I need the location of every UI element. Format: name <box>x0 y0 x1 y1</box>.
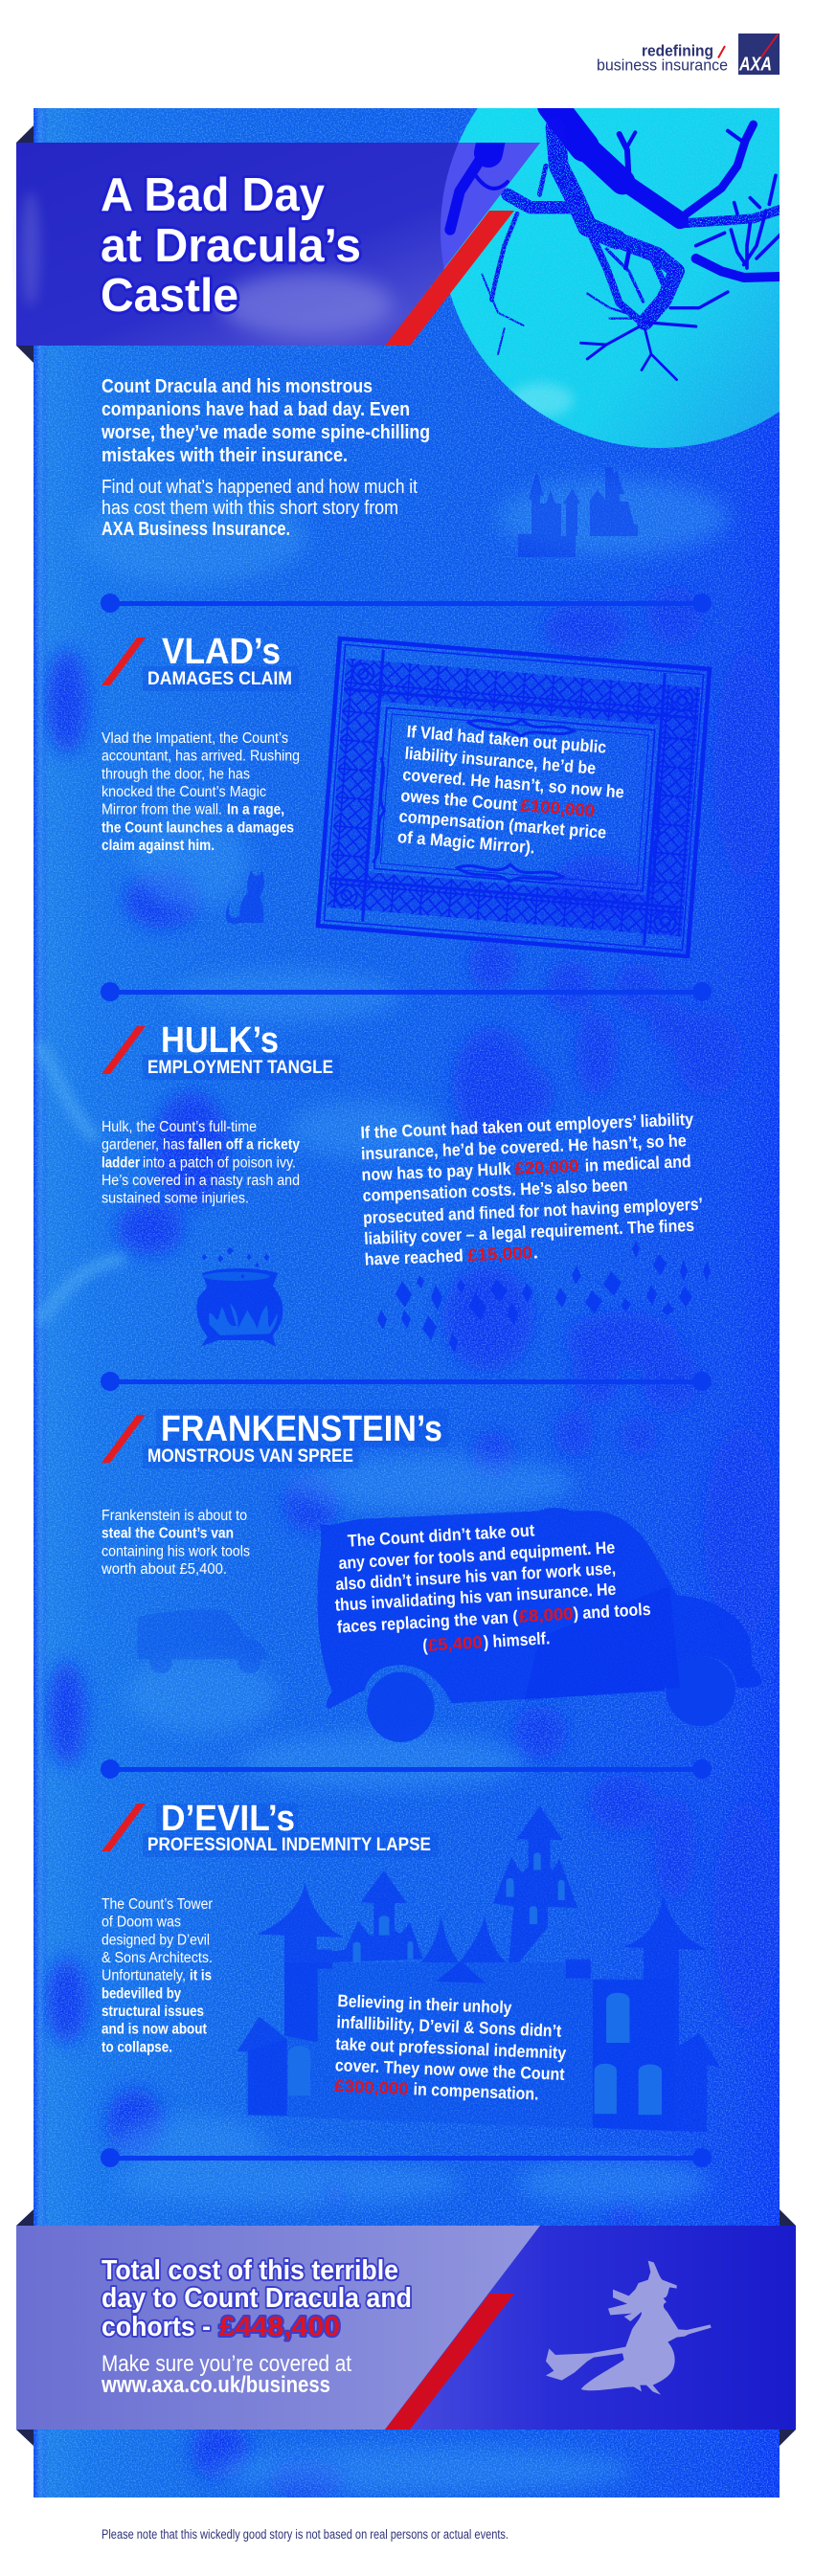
heading: MONSTROUS VAN SPREE <box>147 1446 353 1467</box>
callout text: If the Count had taken out employers’ liability <box>360 1109 694 1142</box>
story text: Unfortunately, <box>102 1968 186 1984</box>
story text: claim against him. <box>102 838 215 854</box>
story text: Frankenstein is about to <box>102 1508 247 1524</box>
story text: knocked the Count’s Magic <box>102 784 266 800</box>
callout text <box>334 1991 567 2104</box>
story text: & Sons Architects. <box>102 1950 213 1966</box>
callout text: £8,000 <box>518 1604 574 1626</box>
callout text: The Count didn’t take out <box>347 1520 535 1551</box>
intro text <box>101 376 430 540</box>
divider 1 <box>101 594 712 613</box>
heading: HULK’s <box>161 1020 279 1061</box>
total text: £448,400 <box>219 2312 340 2342</box>
icon: tree branches <box>482 105 782 380</box>
story text: accountant, has arrived. Rushing <box>102 749 300 765</box>
callout text: also didn’t insure his van for work use, <box>335 1558 616 1594</box>
divider 5 <box>101 2148 712 2167</box>
section: D'Evil <box>102 1799 720 2132</box>
story text: worth about £5,400. <box>101 1561 227 1578</box>
icon: cat <box>226 870 264 924</box>
heading: PROFESSIONAL INDEMNITY LAPSE <box>147 1835 431 1855</box>
intro text: has cost them with this short story from <box>102 498 398 519</box>
title: Castle <box>101 270 238 322</box>
callout text: infallibility, D’evil & Sons didn’t <box>336 2012 562 2041</box>
total text <box>102 2255 412 2342</box>
banner light part <box>16 2226 540 2430</box>
story text: structural issues <box>102 2004 204 2020</box>
callout text: prosecuted and fined for not having employers’ <box>363 1195 703 1227</box>
story text: In a rage, <box>227 802 284 818</box>
banner folds <box>16 2209 796 2446</box>
title: A Bad Day <box>101 169 325 221</box>
story text <box>102 730 300 854</box>
callout text: any cover for tools and equipment. He <box>338 1537 616 1573</box>
callout text: insurance, he’d be covered. He hasn’t, so he <box>361 1131 687 1163</box>
callout text: . <box>532 1243 538 1262</box>
call to action: www.axa.co.uk/business <box>101 2372 330 2398</box>
story text: designed by D’evil <box>102 1932 210 1948</box>
callout text: take out professional indemnity <box>335 2034 567 2063</box>
AXA square <box>738 34 780 75</box>
story text <box>102 1119 300 1207</box>
intro text: Find out what’s happened and how much it <box>102 477 418 498</box>
title: at Dracula’s <box>101 220 361 272</box>
callout text <box>360 1109 703 1269</box>
divider 3 <box>101 1372 712 1391</box>
story text: sustained some injuries. <box>102 1191 249 1207</box>
icon: large van <box>318 1508 761 1742</box>
callout text: £20,000 <box>514 1156 579 1178</box>
total text: Total cost of this terrible <box>102 2255 398 2286</box>
mirror callout text: covered. He hasn’t, so now he <box>402 765 625 802</box>
heading: VLAD’s <box>162 632 281 672</box>
callout text: now has to pay Hulk <box>361 1159 512 1184</box>
callout text: cover. They now owe the Count <box>334 2055 565 2084</box>
panel: total cost banner <box>16 2209 796 2446</box>
icon: floating diamonds <box>377 1241 711 1353</box>
footnote: Please note that this wickedly good story is not based on real persons or actual events. <box>102 2527 509 2542</box>
callout text: £15,000 <box>467 1243 532 1265</box>
banner folds <box>16 125 34 363</box>
call to action <box>101 2351 351 2398</box>
story text: it is <box>190 1968 212 1984</box>
icon: cauldron <box>196 1247 283 1347</box>
story text: He’s covered in a nasty rash and <box>102 1173 300 1189</box>
mirror callout text: £100,000 <box>520 795 596 820</box>
callout text: faces replacing the van ( <box>336 1607 518 1637</box>
total text: day to Count Dracula and <box>102 2283 412 2314</box>
banner dark part <box>385 2226 796 2430</box>
strapline: redefining <box>642 42 713 59</box>
intro text: AXA Business Insurance. <box>102 519 290 540</box>
intro text: worse, they’ve made some spine-chilling <box>101 422 430 443</box>
heading: EMPLOYMENT TANGLE <box>147 1058 333 1078</box>
callout text <box>334 1520 651 1655</box>
story text: the Count launches a damages <box>102 819 294 836</box>
callout text: ( <box>422 1636 428 1655</box>
heading <box>102 632 299 691</box>
divider 2 <box>101 982 712 1001</box>
story text: Vlad the Impatient, the Count’s <box>102 730 288 747</box>
logo: AXA header <box>597 34 780 75</box>
icon: witch <box>546 2261 712 2395</box>
story text: The Count’s Tower <box>102 1896 213 1913</box>
total text: cohorts - <box>102 2312 211 2342</box>
mirror callout text: If Vlad had taken out public <box>406 722 607 757</box>
mirror callout text <box>396 722 625 858</box>
story text: gardener, has <box>102 1137 185 1154</box>
mirror callout text: compensation (market price <box>398 807 607 842</box>
section: Hulk <box>102 1020 711 1353</box>
mirror callout text: owes the Count <box>400 786 518 815</box>
red slash <box>385 2294 514 2430</box>
story text: ladder <box>102 1154 140 1171</box>
heading <box>102 1020 340 1080</box>
icon: castle <box>237 1806 720 2132</box>
callout text: compensation costs. He’s also been <box>362 1176 628 1205</box>
banner shape <box>16 143 540 346</box>
story text: to collapse. <box>102 2039 172 2055</box>
mirror callout text: liability insurance, he’d be <box>404 744 597 778</box>
mirror callout text: of a Magic Mirror). <box>396 827 535 858</box>
callout text: ) and tools <box>573 1600 651 1623</box>
story text: and is now about <box>102 2022 207 2038</box>
red slash <box>385 211 514 346</box>
callout text: ) himself. <box>483 1628 551 1651</box>
panel: title banner <box>14 125 540 363</box>
heading: D’EVIL’s <box>161 1799 295 1839</box>
icon: small van <box>138 1609 267 1673</box>
story text: bedevilled by <box>102 1985 181 2002</box>
story text <box>101 1508 250 1578</box>
story text: steal the Count’s van <box>102 1526 234 1542</box>
callout text: liability cover – a legal requirement. The fines <box>364 1216 694 1248</box>
callout text: Believing in their unholy <box>337 1991 512 2017</box>
heading: FRANKENSTEIN’s <box>161 1409 442 1449</box>
heading: DAMAGES CLAIM <box>147 669 292 689</box>
intro text: Count Dracula and his monstrous <box>102 376 373 397</box>
AXA square: AXA <box>738 54 772 75</box>
heading <box>102 1799 438 1857</box>
moon <box>444 108 780 448</box>
icon: small castle <box>518 467 638 557</box>
strapline <box>597 42 728 75</box>
story text <box>102 1896 213 2055</box>
moon seen through banner <box>441 143 540 268</box>
story text: Hulk, the Count’s full-time <box>102 1119 257 1135</box>
story text: through the door, he has <box>102 766 250 782</box>
call to action: Make sure you’re covered at <box>102 2351 351 2377</box>
callout text: £300,000 <box>334 2076 409 2098</box>
callout text: thus invalidating his van insurance. He <box>334 1579 617 1615</box>
heading <box>102 1409 448 1468</box>
callout text: have reached <box>364 1245 464 1269</box>
divider 4 <box>101 1759 712 1779</box>
story text: Mirror from the wall. <box>102 802 222 818</box>
story text: containing his work tools <box>102 1543 250 1559</box>
icon: magic mirror <box>318 638 710 956</box>
title <box>101 169 361 322</box>
story text: of Doom was <box>102 1915 181 1931</box>
section: Vlad <box>102 632 710 956</box>
callout text: in compensation. <box>413 2079 539 2104</box>
story text: into a patch of poison ivy. <box>143 1154 296 1171</box>
story text: fallen off a rickety <box>188 1137 300 1154</box>
intro text: companions have had a bad day. Even <box>102 399 410 420</box>
intro text: mistakes with their insurance. <box>102 445 348 466</box>
callout text: in medical and <box>584 1152 691 1176</box>
callout text: £5,400 <box>427 1632 483 1655</box>
strapline: business insurance <box>597 56 728 75</box>
section: Frankenstein <box>101 1409 761 1742</box>
